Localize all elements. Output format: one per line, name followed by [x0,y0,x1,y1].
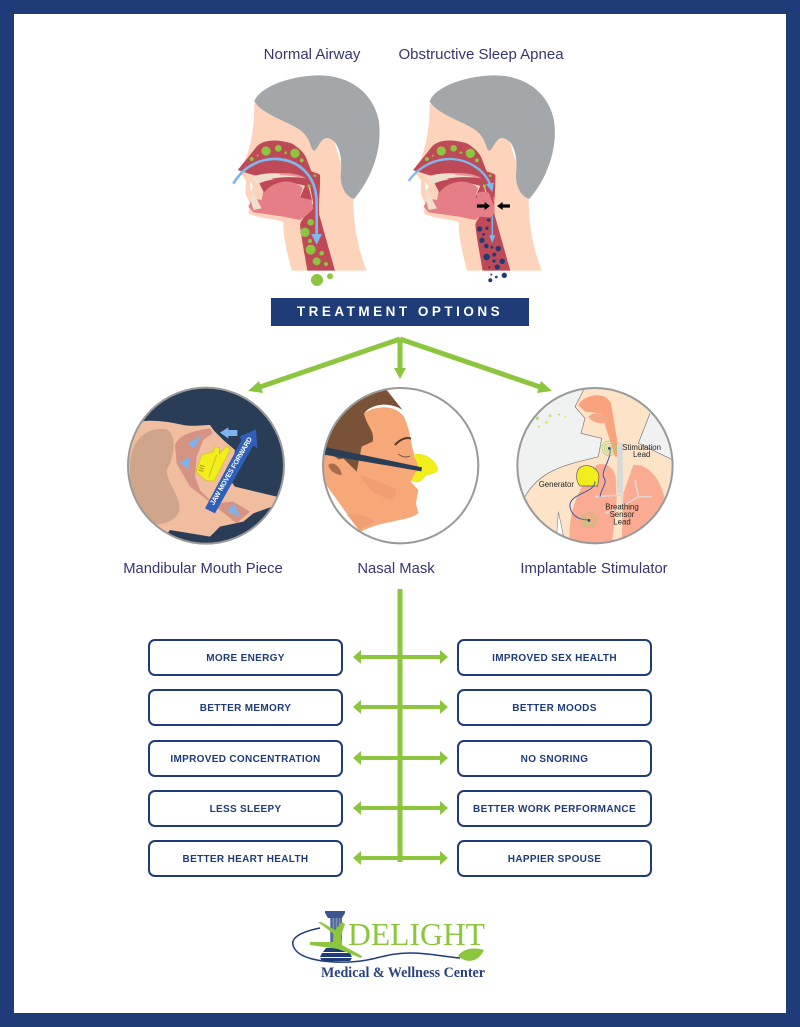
benefit: less sleepy: LESS SLEEPY [210,804,281,815]
benefit: less sleepy [148,790,343,827]
label: stimulation lead: Lead [633,450,650,459]
benefit: better memory: BETTER MEMORY [200,703,291,714]
benefit: improved concentration: IMPROVED CONCENTRATION [170,754,321,765]
illustrations and connectors [127,75,674,977]
benefit: no snoring: NO SNORING [521,754,588,765]
label: breathing sensor lead: Breathing [605,503,639,512]
label: implantable stimulator: Implantable Stimulator [520,561,668,577]
benefit: improved sex health: IMPROVED SEX HEALTH [492,653,617,664]
logo: delight medical and wellness center [293,911,486,981]
label: mandibular mouth piece: Mandibular Mouth Piece [123,561,283,577]
label on arrow: jaw moves forward: JAW MOVES FORWARD [209,436,254,507]
benefit: no snoring [457,740,652,777]
illustration: obstructive sleep apnea [409,75,555,282]
heading: normal airway: Normal Airway [264,46,360,63]
label: breathing sensor lead: Lead [613,518,631,527]
heading: treatment options [271,298,529,326]
benefit: happier spouse [457,840,652,877]
benefit: better moods: BETTER MOODS [512,703,597,714]
icon: implantable stimulator [516,387,674,544]
illustration: normal airway [233,75,380,286]
benefit: more energy [148,639,343,676]
benefit: better heart health: BETTER HEART HEALTH [183,854,308,865]
label: nasal mask: Nasal Mask [357,561,435,577]
benefit: better memory [148,689,343,726]
benefit: better work performance [457,790,652,827]
icon: mandibular mouth piece [127,386,285,545]
benefit: more energy: MORE ENERGY [206,653,285,664]
logo: delight medical and wellness center: DELIGHT [348,917,485,952]
benefit: better moods [457,689,652,726]
benefit: improved concentration [148,740,343,777]
label: breathing sensor lead: Sensor [610,510,635,519]
icon: nasal mask [322,387,480,544]
arrows: benefits trunk and branches [353,589,448,865]
benefit: better heart health [148,840,343,877]
heading: treatment options: TREATMENT OPTIONS [297,304,503,319]
benefit: happier spouse: HAPPIER SPOUSE [508,854,601,865]
benefit: better work performance: BETTER WORK PERFORMANCE [473,804,636,815]
logo: delight medical and wellness center: Medical & Wellness Center [321,965,486,981]
heading: obstructive sleep apnea: Obstructive Sleep Apnea [398,46,564,63]
benefit: improved sex health [457,639,652,676]
arrows: treatment options branches [248,339,552,393]
label: generator: Generator [539,480,574,489]
label: stimulation lead: Stimulation [622,443,661,452]
